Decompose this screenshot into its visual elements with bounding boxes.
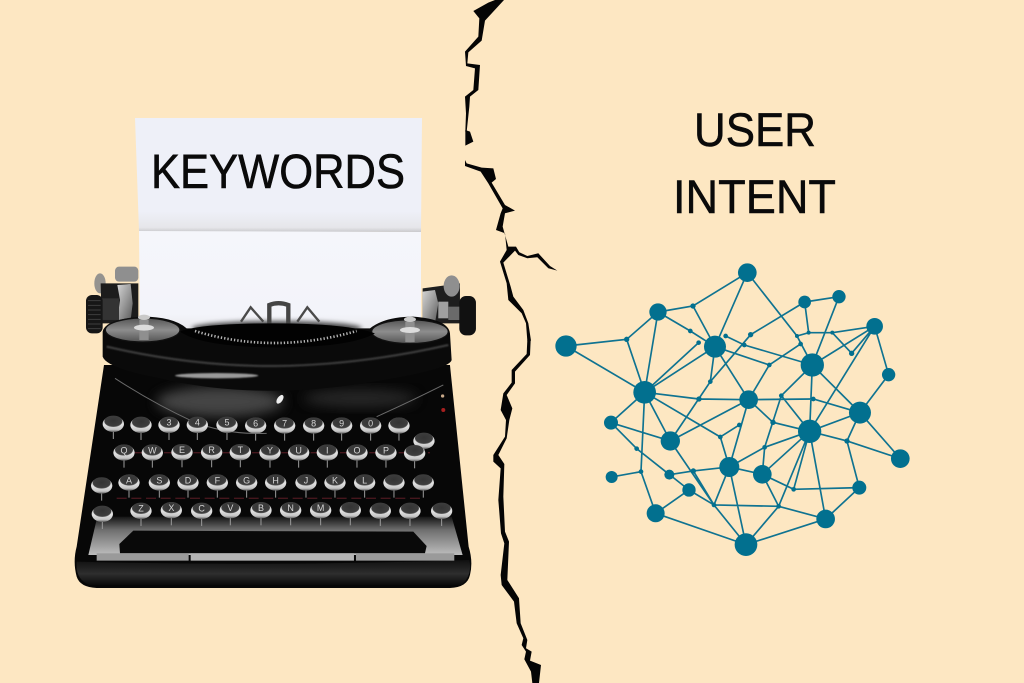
- ASDF row keys: J: [304, 475, 308, 485]
- paper guides and hook: [241, 303, 319, 325]
- ZXCV row keys: N: [287, 503, 294, 513]
- heading: user intent: [673, 103, 836, 223]
- QWERTY row keys: W: [148, 445, 157, 455]
- number row keys: 3: [166, 418, 171, 428]
- number row keys: 7: [282, 418, 287, 428]
- right reflection above keys: [303, 389, 417, 408]
- number row keys: 8: [311, 418, 316, 428]
- QWERTY row keys: R: [208, 445, 215, 455]
- heading line: INTENT: INTENT: [673, 170, 836, 223]
- ASDF row keys: G: [243, 475, 250, 485]
- front rail: [76, 560, 470, 585]
- ASDF row keys: F: [215, 475, 221, 485]
- ASDF row keys: [91, 474, 434, 501]
- large network nodes: [555, 263, 910, 556]
- number row keys: 0: [368, 418, 373, 428]
- crack dividing the page: [465, 0, 557, 683]
- QWERTY row keys: [113, 433, 435, 468]
- ASDF row keys: D: [185, 475, 192, 485]
- left post: [134, 315, 154, 340]
- ASDF row keys: H: [272, 475, 279, 485]
- ZXCV row keys: Z: [138, 504, 144, 514]
- crack: upper section: [465, 0, 557, 341]
- right post: [400, 317, 420, 342]
- QWERTY row keys: I: [326, 445, 329, 455]
- heading line: USER: USER: [694, 103, 816, 156]
- crack: lower section: [493, 340, 541, 683]
- ZXCV row keys: V: [227, 503, 233, 513]
- paper: upper sheet: [135, 118, 422, 232]
- left carriage mechanism: [86, 267, 138, 333]
- reflective panel above keys: [157, 387, 283, 417]
- network graph: [555, 263, 910, 556]
- red ink lines between rows: [117, 453, 430, 498]
- QWERTY row keys: Y: [267, 445, 273, 455]
- QWERTY row keys: P: [383, 445, 389, 455]
- ZXCV row keys: C: [198, 504, 205, 514]
- type basket: [180, 323, 375, 347]
- number row keys: 4: [195, 418, 200, 428]
- right carriage mechanism: [423, 275, 476, 335]
- ZXCV row keys: M: [317, 503, 324, 513]
- network links: [566, 273, 900, 545]
- number row keys: 9: [339, 418, 344, 428]
- right pod: [372, 320, 448, 344]
- paper: lower sheet: [139, 230, 421, 335]
- space bar: [97, 531, 454, 561]
- number row keys: 5: [224, 418, 229, 428]
- QWERTY row keys: E: [179, 445, 185, 455]
- ASDF row keys: S: [156, 475, 162, 485]
- QWERTY row keys: T: [238, 445, 244, 455]
- type bars: [195, 331, 357, 343]
- housing highlights: [107, 345, 448, 405]
- number row keys: 6: [253, 418, 258, 428]
- left pod: [105, 318, 180, 342]
- typewriter illustration: [75, 267, 476, 588]
- curved trim line: [115, 378, 443, 434]
- QWERTY row keys: U: [295, 445, 302, 455]
- QWERTY row keys: O: [353, 445, 360, 455]
- ASDF row keys: A: [126, 475, 132, 485]
- paper shadow above the platen: [192, 321, 362, 336]
- ASDF row keys: K: [332, 475, 338, 485]
- ZXCV row keys: [92, 502, 452, 529]
- typewriter body: [75, 365, 471, 588]
- label: KEYWORDS: KEYWORDS: [151, 145, 405, 199]
- ASDF row keys: L: [362, 475, 367, 485]
- red indicators: [441, 394, 445, 412]
- tray: [88, 517, 463, 555]
- keyboard: [91, 416, 452, 529]
- paper sheet with keyword: [135, 118, 422, 335]
- arched top housing: [103, 317, 452, 391]
- ZXCV row keys: B: [258, 503, 264, 513]
- QWERTY row keys: Q: [120, 445, 127, 455]
- small network junctions: [624, 303, 854, 509]
- number row keys: [103, 416, 410, 441]
- ZXCV row keys: X: [168, 503, 174, 513]
